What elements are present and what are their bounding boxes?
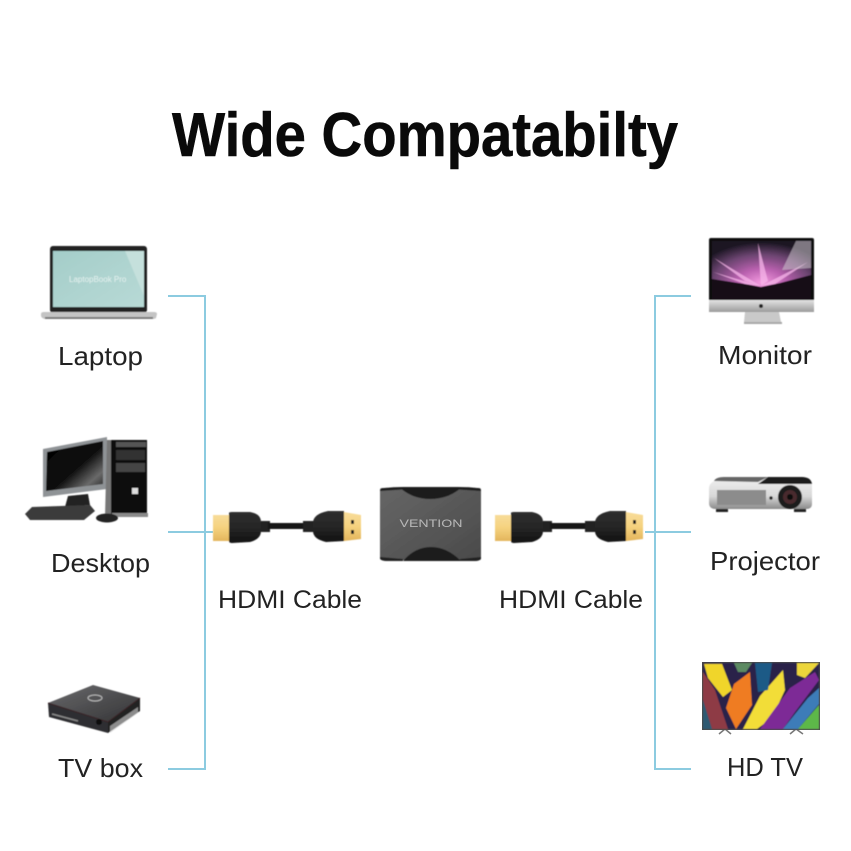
- label: HD TV: HD TV: [727, 752, 804, 782]
- icon: projector: [709, 477, 812, 512]
- icon: desktop computer: [25, 437, 148, 522]
- icon: laptop: [41, 246, 157, 319]
- icon: Vention HDMI coupler: [380, 487, 481, 561]
- label: right HDMI cable: HDMI Cable: [499, 586, 643, 614]
- icon: HD TV: [702, 662, 820, 734]
- label: Laptop: Laptop: [58, 341, 143, 371]
- label: TV box: TV box: [58, 753, 143, 783]
- brand text: VENTION: [400, 518, 463, 530]
- label: Monitor: Monitor: [718, 340, 812, 370]
- connector: left bracket: [168, 296, 213, 769]
- icon: TV box: [48, 685, 140, 733]
- label: Projector: Projector: [710, 546, 820, 576]
- title: Wide Compatabilty: [172, 101, 678, 170]
- icon: laptop: LaptopBook Pro: [69, 275, 127, 284]
- icon: left HDMI cable: [213, 511, 361, 543]
- icon: right HDMI cable: [495, 511, 643, 543]
- label: left HDMI cable: HDMI Cable: [218, 586, 362, 614]
- label: Desktop: Desktop: [51, 548, 150, 578]
- icon: monitor: [709, 238, 814, 324]
- connector: right bracket: [645, 296, 691, 769]
